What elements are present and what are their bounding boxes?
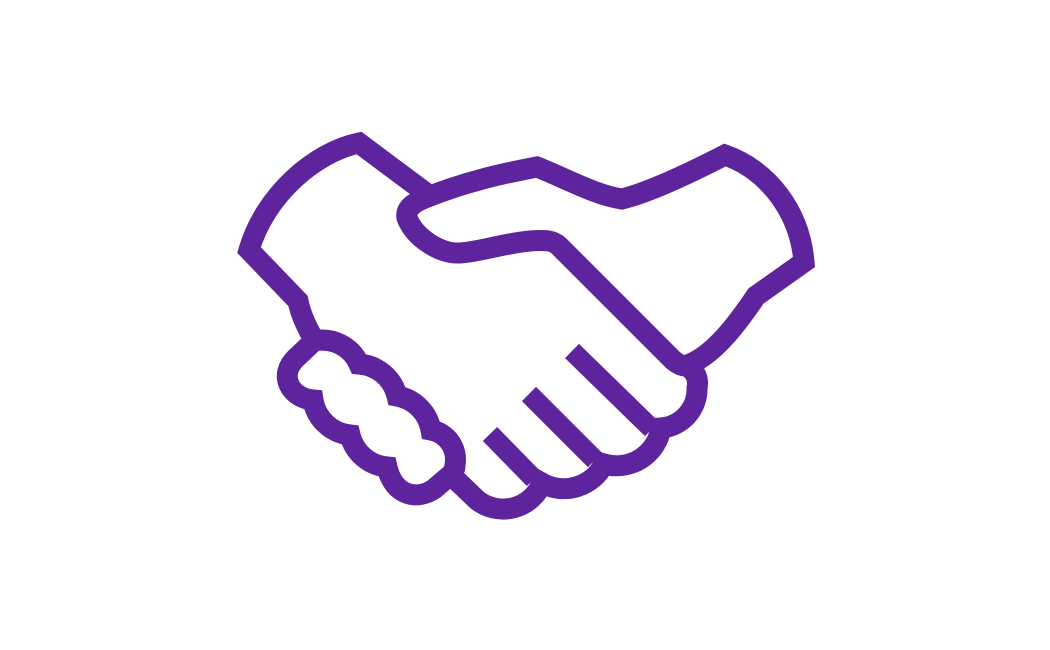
- fist knuckles: [287, 340, 456, 495]
- left hand cuff and wrist: [249, 143, 426, 343]
- right hand cuff, thumb and diagonal: [407, 155, 804, 509]
- finger divider lines: [490, 351, 652, 479]
